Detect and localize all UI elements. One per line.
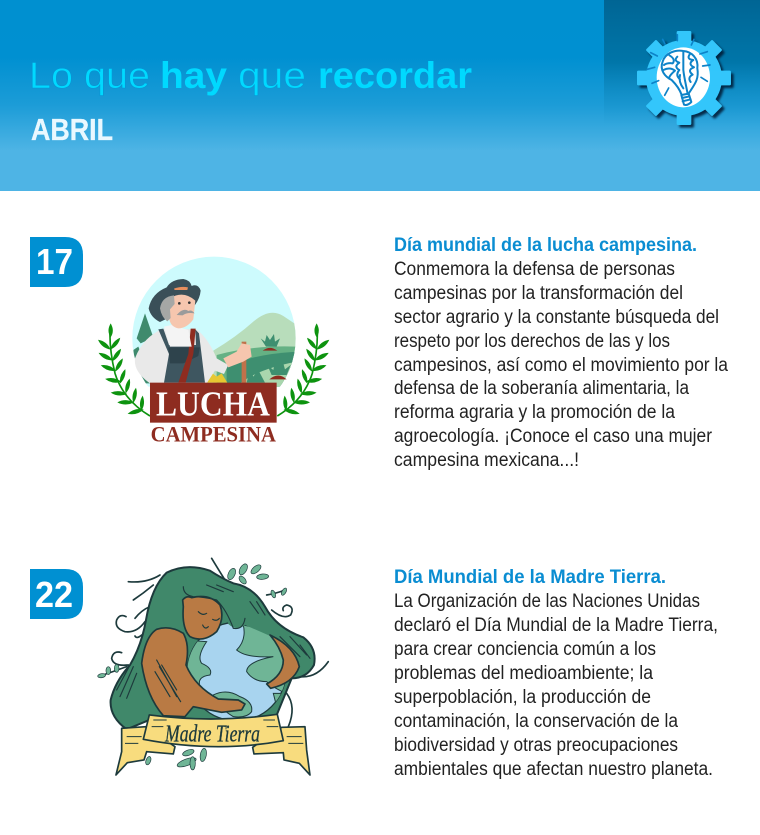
text block: madre tierra: La Organización de las Naciones Unidas (394, 591, 700, 612)
text block: lucha campesina: campesinos, así como el movimiento por la (394, 355, 728, 376)
title: que (238, 55, 306, 96)
ribbon: Madre Tierra (164, 720, 260, 747)
text block: lucha campesina: campesinas por la transformación del (394, 283, 683, 304)
text block: madre tierra: problemas del medioambiente; la (394, 663, 653, 684)
text block: lucha campesina (394, 235, 728, 471)
hair (111, 567, 315, 729)
icon: gear with brain light bulb (637, 31, 731, 125)
woman embracing globe (142, 596, 299, 717)
text block: lucha campesina: sector agrario y la constante búsqueda del (394, 307, 719, 328)
date badge 17 (30, 237, 83, 287)
text block: lucha campesina: defensa de la soberanía alimentaria, la (394, 378, 689, 399)
date badge 22: 22 (35, 574, 73, 615)
illustration: madre tierra (97, 558, 328, 775)
text block: madre tierra: superpoblación, la producción de (394, 687, 651, 708)
illustration: lucha campesina (97, 253, 331, 447)
ribbon (116, 714, 310, 775)
text block: madre tierra: contaminación, la conservación de la (394, 711, 678, 732)
month label: ABRIL (31, 112, 113, 147)
text block: lucha campesina: campesina mexicana...! (394, 450, 579, 471)
text block: lucha campesina: reforma agraria y la promoción de la (394, 402, 675, 423)
text block: madre tierra: para crear conciencia común a los (394, 639, 656, 660)
farmer (135, 279, 252, 383)
header banner (0, 0, 760, 191)
name banner: CAMPESINA (151, 422, 277, 447)
name banner: LUCHA (156, 386, 270, 424)
text block: lucha campesina: Día mundial de la lucha campesina. (394, 235, 697, 256)
date badge 22 (30, 569, 83, 619)
text block: madre tierra: ambientales que afectan nuestro planeta. (394, 759, 713, 780)
text block: lucha campesina: Conmemora la defensa de personas (394, 259, 675, 280)
name banner (150, 383, 277, 447)
date badge 17: 17 (36, 241, 73, 282)
title: hay (160, 55, 227, 96)
text block: lucha campesina: respeto por los derechos de las y los (394, 331, 670, 352)
text block: madre tierra: Día Mundial de la Madre Tierra. (394, 567, 666, 588)
laurel branches (97, 323, 331, 416)
hair lock over globe (217, 593, 273, 637)
title (29, 55, 472, 96)
landscape circle (130, 253, 300, 387)
globe (187, 622, 285, 718)
plants (247, 334, 291, 383)
text block: madre tierra: declaró el Día Mundial de la Madre Tierra, (394, 615, 718, 636)
title: recordar (318, 55, 472, 96)
text block: lucha campesina: agroecología. ¡Conoce el caso una mujer (394, 426, 713, 447)
text block: madre tierra: biodiversidad y otras preocupaciones (394, 735, 678, 756)
text block: madre tierra (394, 567, 718, 780)
facial lines and shading (117, 585, 310, 702)
title: Lo que (29, 55, 150, 96)
vines and leaves (97, 558, 328, 770)
